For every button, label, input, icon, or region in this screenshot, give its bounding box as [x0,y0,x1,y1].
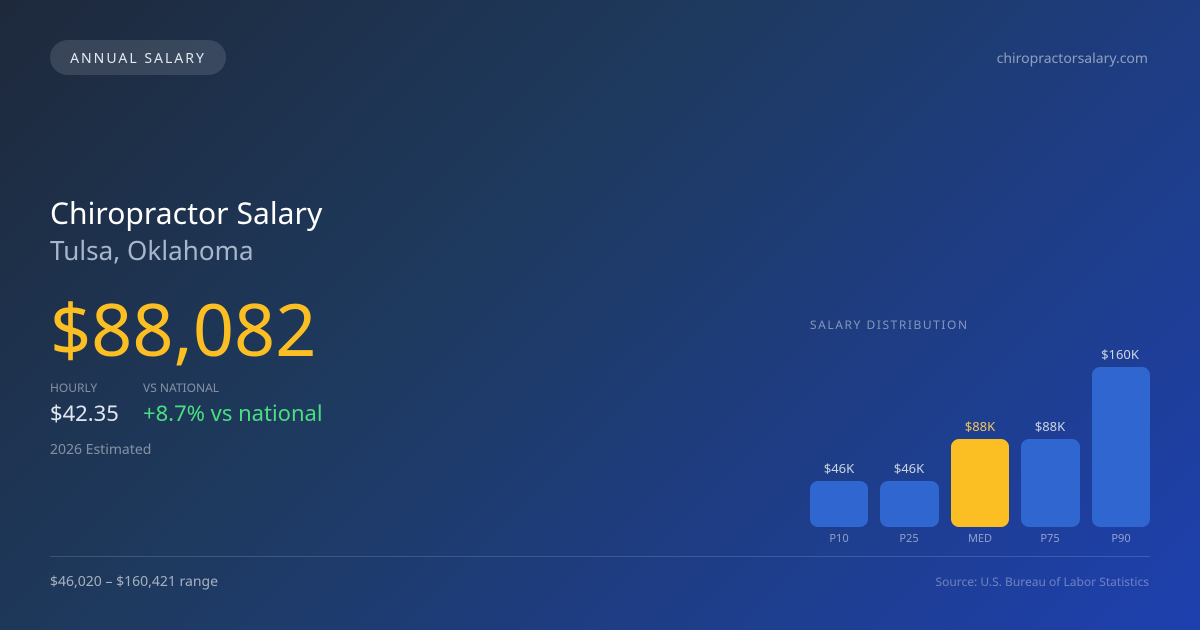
value: $88K [965,417,995,435]
value: $46K [894,459,924,477]
name: P10 [829,531,849,546]
bar [1021,439,1080,527]
bar [951,439,1009,527]
bar group: MED [951,417,1009,546]
value: $160K [1101,345,1139,363]
title: Chiropractor Salary [50,192,322,233]
subtitle: location: Tulsa, Oklahoma [50,232,254,268]
vs national stat [143,379,323,428]
value: $46K [824,459,854,477]
chart: salary distribution [810,316,1150,546]
bar group: P90 [1092,345,1150,546]
salary range: $46,020 – $160,421 range [50,572,218,591]
name: P25 [899,531,919,546]
name: P75 [1040,531,1060,546]
bar group: P75 [1021,417,1080,546]
chart heading: SALARY DISTRIBUTION [810,316,969,333]
source: Source: U.S. Bureau of Labor Statistics [936,573,1149,590]
name: MED [968,531,992,546]
vs national value: +8.7% vs national [143,398,323,428]
bar group: P10 [810,459,868,546]
bar [810,481,868,527]
hourly label: HOURLY [50,379,97,396]
estimate note: 2026 Estimated [50,440,151,459]
value: $88K [1035,417,1065,435]
site domain: chiropractorsalary.com [997,49,1148,68]
vs national label: VS NATIONAL [143,379,219,396]
bar group: P25 [880,459,939,546]
name: P90 [1111,531,1131,546]
main salary figure: $88,082 [50,280,316,378]
badge: annual salary: ANNUAL SALARY [70,49,206,68]
bar [880,481,939,527]
badge: annual salary [50,40,226,75]
hourly stat [50,379,119,428]
bar [1092,367,1150,527]
hourly value: $42.35 [50,398,119,428]
